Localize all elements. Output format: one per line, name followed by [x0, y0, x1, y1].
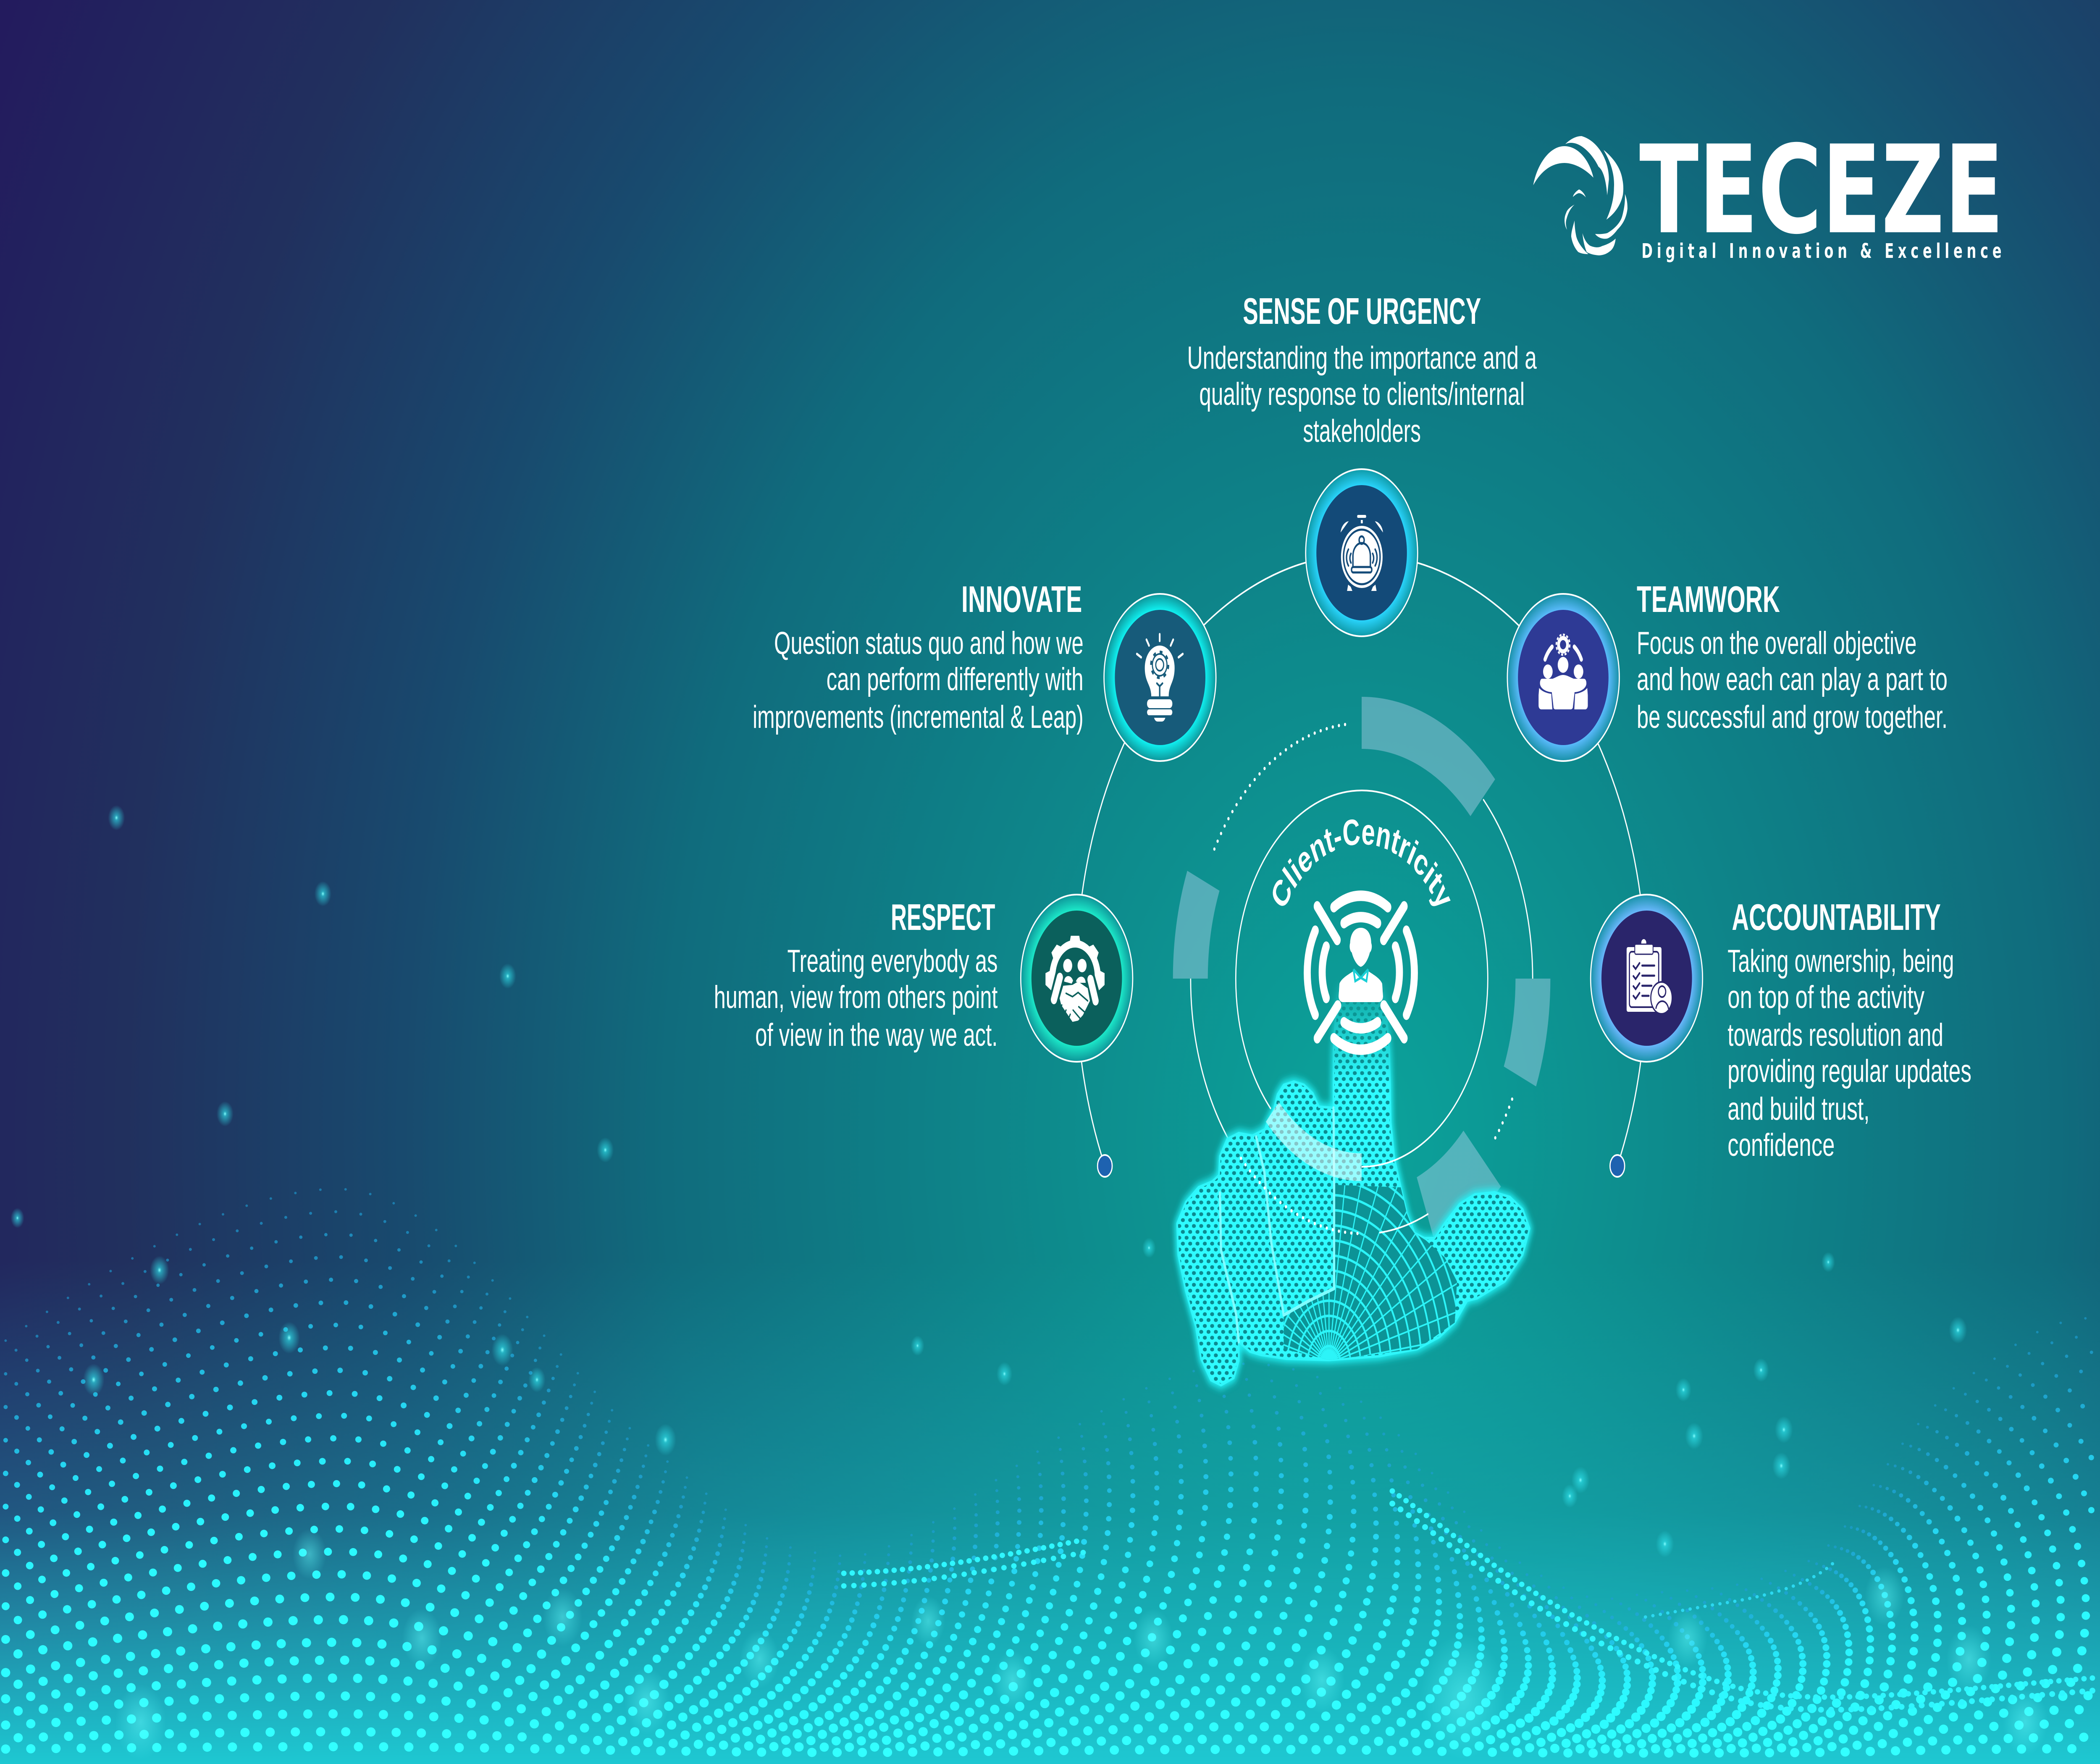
node: Respect [1021, 895, 1133, 1062]
description [1637, 625, 1948, 735]
description: confidence [1727, 1127, 1835, 1163]
wireframe hand [1171, 987, 1535, 1393]
node: Accountability [1591, 895, 1703, 1062]
description: towards resolution and [1727, 1017, 1943, 1053]
description [753, 625, 1084, 735]
icon: clipboard checklist with user [1627, 939, 1672, 1014]
description: quality response to clients/internal [1199, 376, 1525, 412]
node: Sense of Urgency [1306, 469, 1418, 636]
text block: Teamwork [1637, 578, 1948, 735]
description [1727, 943, 1971, 1163]
icon: client target person [1307, 896, 1415, 1050]
heading: INNOVATE [961, 578, 1082, 620]
outer orbit connector line [1076, 554, 1646, 1166]
icon: team with gear [1538, 635, 1588, 709]
description: stakeholders [1303, 413, 1421, 449]
description: Question status quo and how we [774, 625, 1084, 661]
icon: light bulb with gear [1137, 634, 1183, 722]
description: providing regular updates [1727, 1053, 1971, 1089]
icon: alarm clock with bell [1341, 515, 1383, 591]
heading: TEAMWORK [1637, 578, 1780, 620]
description [714, 943, 998, 1053]
description: of view in the way we act. [755, 1017, 998, 1053]
hand finger contours [1220, 1108, 1334, 1342]
glowing particles [10, 805, 2048, 1760]
description: can perform differently with [827, 661, 1084, 697]
logo wordmark: TECEZE [1639, 120, 2004, 261]
text block: Innovate [753, 578, 1084, 735]
heading: ACCOUNTABILITY [1732, 896, 1941, 938]
description: be successful and grow together. [1637, 699, 1948, 735]
description: Focus on the overall objective [1637, 625, 1916, 661]
description: improvements (incremental & Leap) [753, 699, 1084, 735]
icon: handshake in gear [1045, 936, 1105, 1022]
logo swirl icon [1533, 136, 1628, 255]
heading: SENSE OF URGENCY [1243, 290, 1481, 332]
description: and build trust, [1727, 1091, 1870, 1126]
heading: RESPECT [891, 896, 995, 938]
description: Taking ownership, being [1727, 943, 1954, 979]
description [1187, 340, 1537, 449]
description: human, view from others point [714, 979, 998, 1015]
dotted particle wave [5, 1189, 2095, 1753]
logo [1533, 120, 2004, 263]
description: and how each can play a part to [1637, 661, 1948, 697]
orbit end dot left [1097, 1155, 1112, 1177]
inner circle and arcs over hand [1236, 790, 1488, 1234]
logo tagline: Digital Innovation & Excellence [1641, 239, 2002, 263]
middle ring arcs behind hand [1191, 724, 1533, 1142]
text block: Sense of Urgency [1187, 290, 1537, 449]
curved label: Client-Centricity: Client-Centricity [1265, 811, 1458, 916]
text block: Respect [714, 896, 998, 1053]
orbit end dot right [1610, 1155, 1625, 1177]
text block: Accountability [1727, 896, 1971, 1163]
node: Teamwork [1507, 594, 1619, 761]
white ring segment over hand [1266, 1102, 1362, 1181]
node: Innovate [1104, 594, 1216, 761]
translucent ring segments [1173, 697, 1550, 1250]
description: Treating everybody as [787, 943, 998, 979]
description: Understanding the importance and a [1187, 340, 1537, 375]
person head and body [1339, 928, 1383, 1002]
description: on top of the activity [1727, 979, 1925, 1015]
